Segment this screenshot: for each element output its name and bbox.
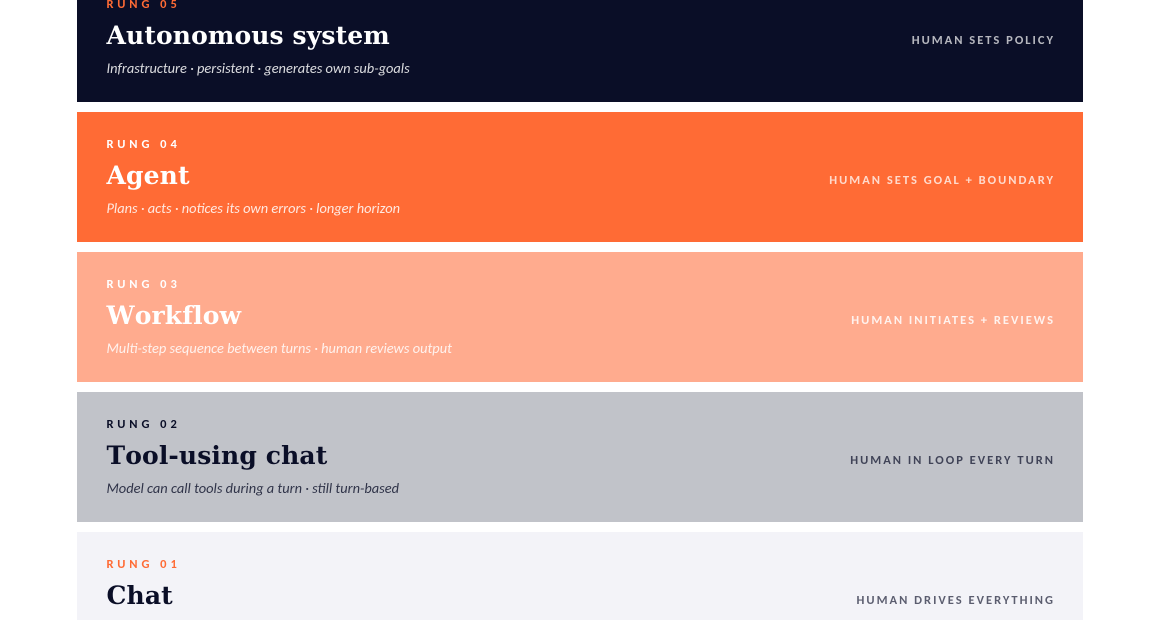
rung label 02: RUNG 02	[106, 417, 181, 432]
human role: in loop every turn: HUMAN IN LOOP EVERY TURN	[850, 453, 1055, 468]
description: agent: Plans · acts · notices its own errors · longer horizon	[106, 199, 400, 217]
panel: rung 05 autonomous system	[77, 0, 1083, 102]
panel: rung 01 chat	[77, 532, 1083, 620]
panel: rung 04 agent	[77, 112, 1083, 242]
description: tool-using chat: Model can call tools during a turn · still turn-based	[106, 479, 399, 497]
panel: rung 03 workflow	[77, 252, 1083, 382]
heading: chat: Chat	[106, 580, 173, 610]
heading: workflow: Workflow	[106, 300, 241, 330]
heading: autonomous system: Autonomous system	[106, 20, 390, 50]
panel: rung 02 tool-using chat	[77, 392, 1083, 522]
human role: goal and boundary: HUMAN SETS GOAL + BOUNDARY	[829, 173, 1055, 188]
description: workflow: Multi-step sequence between turns · human reviews output	[106, 339, 452, 357]
rung label 01: RUNG 01	[106, 557, 181, 572]
description: autonomous system: Infrastructure · persistent · generates own sub-goals	[106, 59, 410, 77]
rung label 03: RUNG 03	[106, 277, 181, 292]
human role: sets policy: HUMAN SETS POLICY	[912, 33, 1055, 48]
human role: drives everything: HUMAN DRIVES EVERYTHING	[857, 593, 1055, 608]
heading: agent: Agent	[106, 160, 190, 190]
human role: initiates and reviews: HUMAN INITIATES + REVIEWS	[851, 313, 1055, 328]
rung label 04: RUNG 04	[106, 137, 181, 152]
heading: tool-using chat: Tool-using chat	[106, 440, 327, 470]
